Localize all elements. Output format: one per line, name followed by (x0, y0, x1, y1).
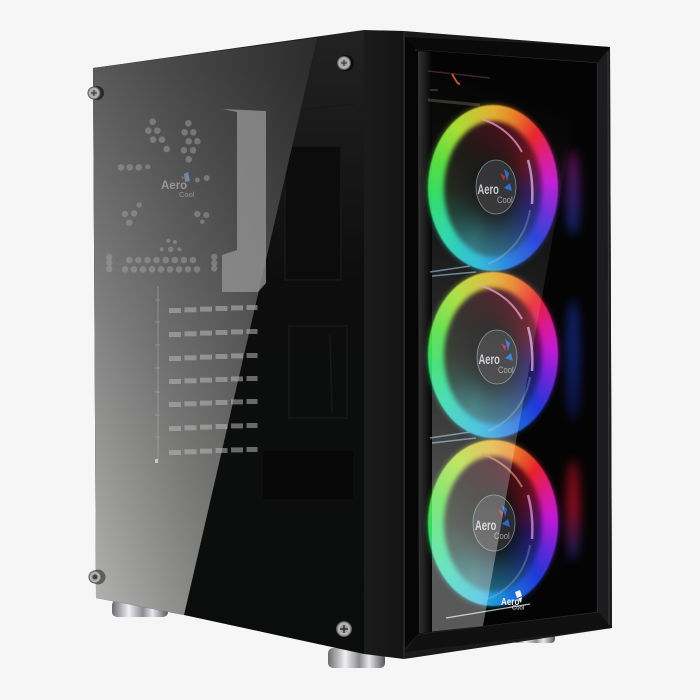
fan 1 hub and highlights: Aero (478, 182, 499, 197)
fan 3 (424, 436, 562, 610)
front panel frame (404, 31, 612, 659)
screw: bottom left (88, 570, 106, 584)
fan 1 hub and highlights: Cool (497, 194, 513, 205)
rear logo: Aero (161, 180, 187, 192)
rear logo (161, 172, 195, 199)
screw: top right (337, 55, 354, 71)
fan 3 hub and highlights (472, 453, 534, 600)
expansion slot dashes (169, 305, 258, 455)
front left pillar (364, 30, 404, 659)
fan 2 hub and highlights: Cool (498, 364, 514, 375)
foot: left rear (112, 600, 168, 617)
side glow: middle fan (566, 300, 580, 420)
side panel interior (93, 30, 364, 654)
screw: bottom right (336, 621, 352, 637)
fan 2 (424, 268, 562, 440)
side glow: top fan (566, 150, 580, 235)
internal hardware through glass (428, 71, 530, 618)
front bottom logo: Cool (512, 604, 524, 612)
fan 3 hub and highlights: Aero (475, 518, 496, 533)
rear logo: Cool (179, 190, 195, 199)
fan 3 hub and highlights: Cool (494, 530, 510, 541)
fan 2 hub and highlights: Aero (478, 352, 500, 367)
foot: front corner (328, 648, 385, 668)
side glow: bottom fan (566, 460, 580, 560)
reflective glass area (93, 38, 317, 615)
fan 2 hub and highlights (476, 285, 534, 432)
front bottom logo: Aero (501, 596, 520, 607)
fan 1 hub and highlights (476, 118, 534, 265)
rear fan perforation (106, 118, 218, 273)
slot cover line (155, 286, 160, 463)
fan 1 (424, 101, 562, 273)
screw: top left (88, 86, 104, 100)
PSU cutout bracket (222, 109, 266, 292)
interior parts (262, 104, 355, 500)
foot: right rear (513, 632, 555, 643)
front glass (417, 50, 597, 634)
